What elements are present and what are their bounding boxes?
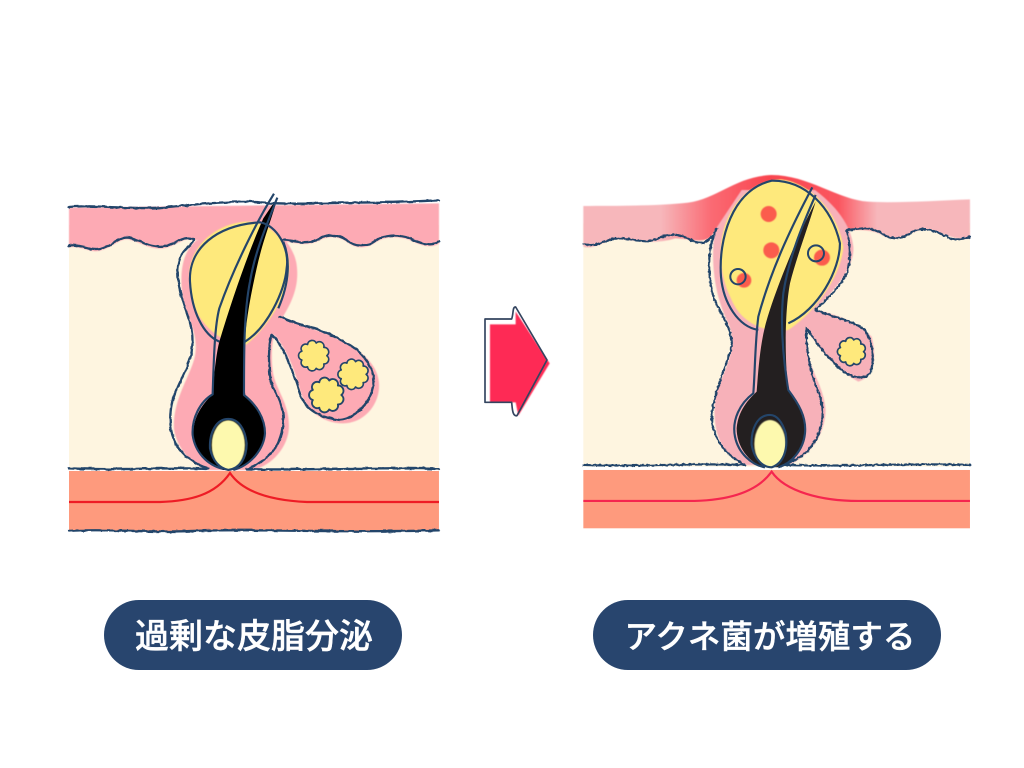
panel: normal follicle with excess sebum	[69, 194, 439, 532]
sebum plug	[189, 222, 289, 344]
epidermis raised gradient band	[583, 175, 970, 247]
arrow red fill	[490, 312, 550, 416]
follicle pink sheath	[713, 190, 874, 465]
subcutaneous salmon layer	[69, 471, 439, 531]
skin outlines	[583, 228, 970, 466]
hair shaft and root	[193, 198, 277, 470]
sebum plug	[721, 179, 843, 331]
hair shaft and root	[737, 202, 816, 467]
arrow dark outline	[485, 307, 547, 416]
bacteria outlines	[730, 245, 824, 284]
blood vessel: left panel	[69, 473, 439, 502]
dermis background	[583, 223, 970, 467]
blood vessel	[583, 472, 970, 501]
skin outlines	[69, 200, 439, 532]
label: acne bacteria multiply: アクネ菌が増殖する	[625, 619, 915, 655]
acne bacteria	[737, 206, 830, 288]
epidermis pink band	[69, 203, 439, 251]
arrow: progression from left to right	[485, 307, 550, 416]
follicle pink sheath	[174, 224, 379, 470]
label: excess sebum: 過剰な皮脂分泌	[135, 618, 373, 656]
label: acne bacteria multiply	[593, 600, 941, 670]
sebaceous gland cell	[837, 338, 865, 366]
follicle inner outlines	[721, 181, 840, 467]
hair papilla	[212, 420, 245, 470]
sebaceous gland cells	[299, 340, 368, 412]
label: excess sebum	[104, 600, 402, 670]
hair papilla	[754, 420, 786, 468]
follicle inner outlines	[190, 194, 288, 470]
subcutaneous salmon layer	[583, 470, 970, 528]
panel: inflamed follicle with acne bacteria	[583, 175, 970, 528]
dermis background	[69, 225, 439, 470]
